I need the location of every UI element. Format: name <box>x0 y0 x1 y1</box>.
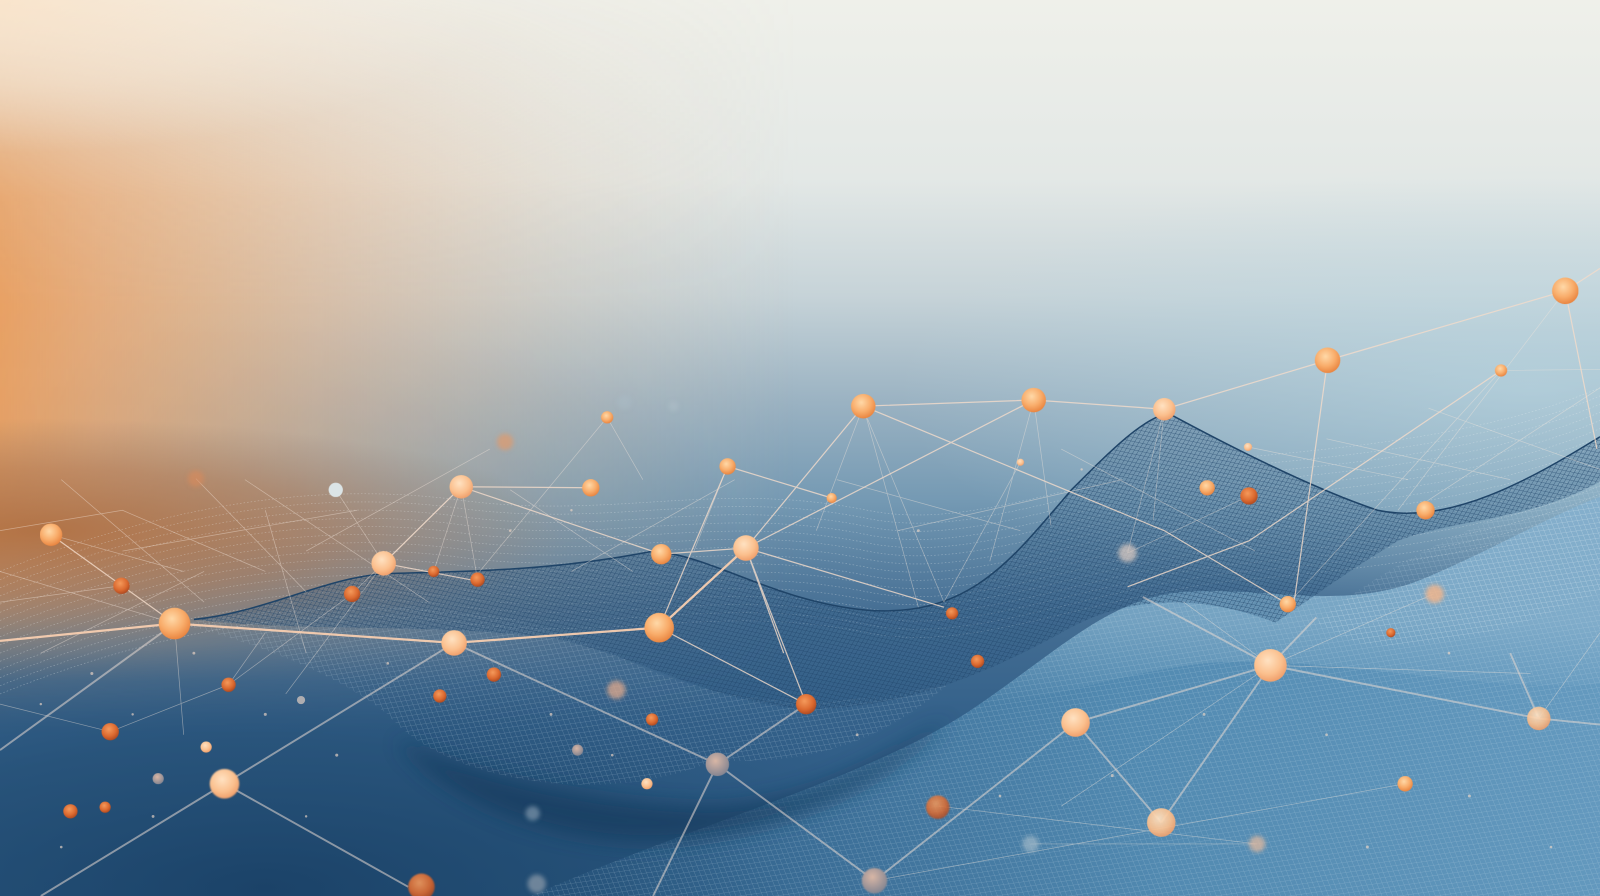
foreground connections <box>0 597 1600 896</box>
right mesh band <box>1316 480 1600 646</box>
lower blue wave <box>531 497 1600 896</box>
main glowing connections <box>0 548 746 643</box>
light mesh sheet <box>184 605 949 785</box>
faint contour mesh <box>0 388 1600 694</box>
dark mesh wave <box>194 413 1600 709</box>
dark wave shadow <box>398 719 949 842</box>
large glowing nodes <box>40 278 1579 896</box>
bright network connections <box>51 268 1600 704</box>
small orange nodes <box>63 364 1507 818</box>
thin background connections <box>0 291 1600 881</box>
scattered particles <box>40 468 1552 849</box>
blurred background nodes <box>188 395 1444 893</box>
